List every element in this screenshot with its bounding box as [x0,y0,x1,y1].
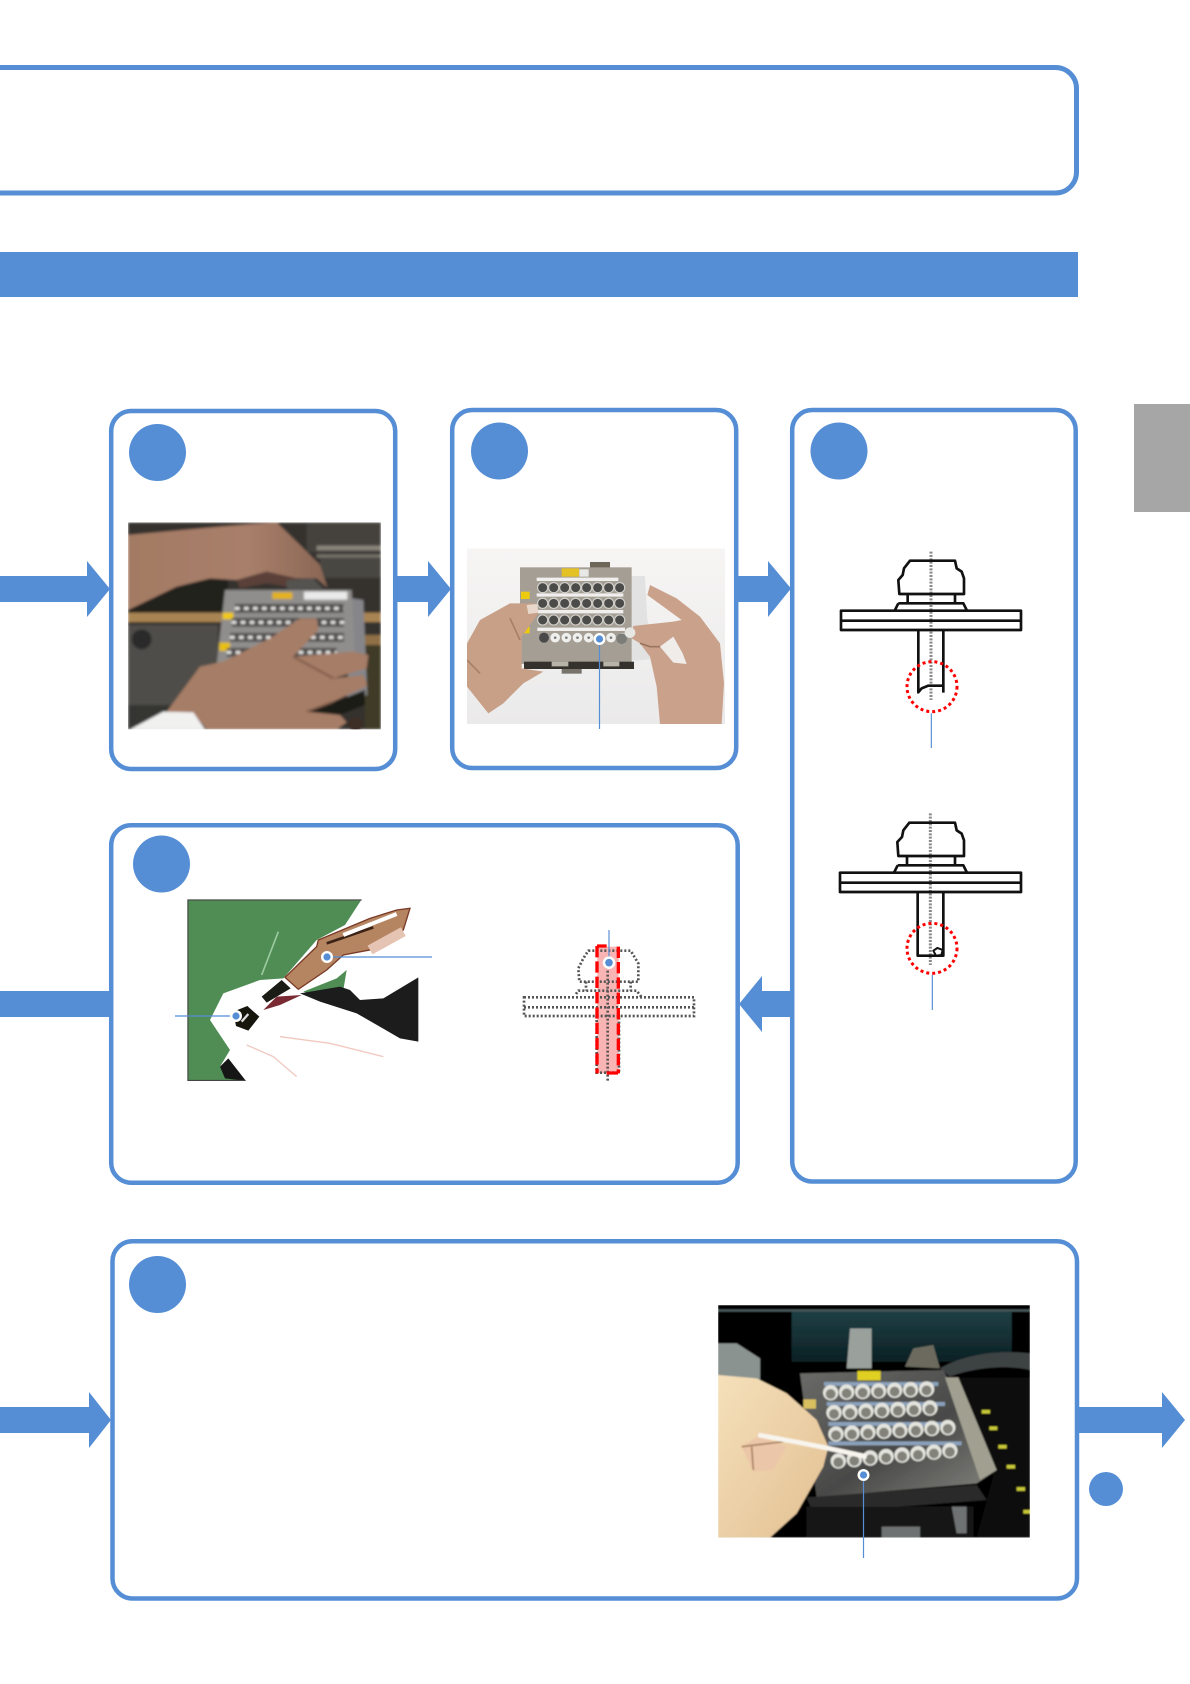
step 4 number badge [133,836,190,892]
step 5 number badge [129,1256,186,1313]
diagram: nozzle normal tip [841,552,1021,748]
diagram: area to clean [524,930,694,1082]
arrow: step 1 to step 2 [397,561,451,617]
top outlined box [0,68,1076,193]
callouts: brush parts [175,951,432,1022]
panel: step 5 [112,1241,1077,1598]
photo: wiping nozzle plate in machine [718,1305,1030,1538]
callout: plate surface [858,1469,870,1558]
arrow: step 2 to step 3 [738,561,791,617]
arrow: intake to step 4 [0,991,111,1017]
photo: cleaning nozzle with brush [187,899,419,1081]
small page marker circle [1089,1472,1123,1506]
photo: hands placing head unit [128,522,381,732]
arrow: exit from step 5 [1077,1392,1185,1448]
panel: step 4 [111,825,738,1183]
callout: part on plate [594,633,606,729]
arrow: intake to step 5 [0,1392,111,1448]
diagram: nozzle damaged tip [840,813,1021,1010]
side tab [1134,404,1190,512]
step 1 number badge [129,424,186,481]
panel: step 2 [452,410,736,768]
arrow: intake to step 1 [0,561,110,617]
photo: hands holding nozzle plate [467,548,725,724]
section heading bar [0,252,1078,297]
step 2 number badge [471,422,528,480]
panel: step 1 [111,411,395,769]
panel: step 3 [792,410,1076,1182]
step 3 number badge [810,422,868,480]
arrow: step 3 to step 4 [739,976,792,1032]
